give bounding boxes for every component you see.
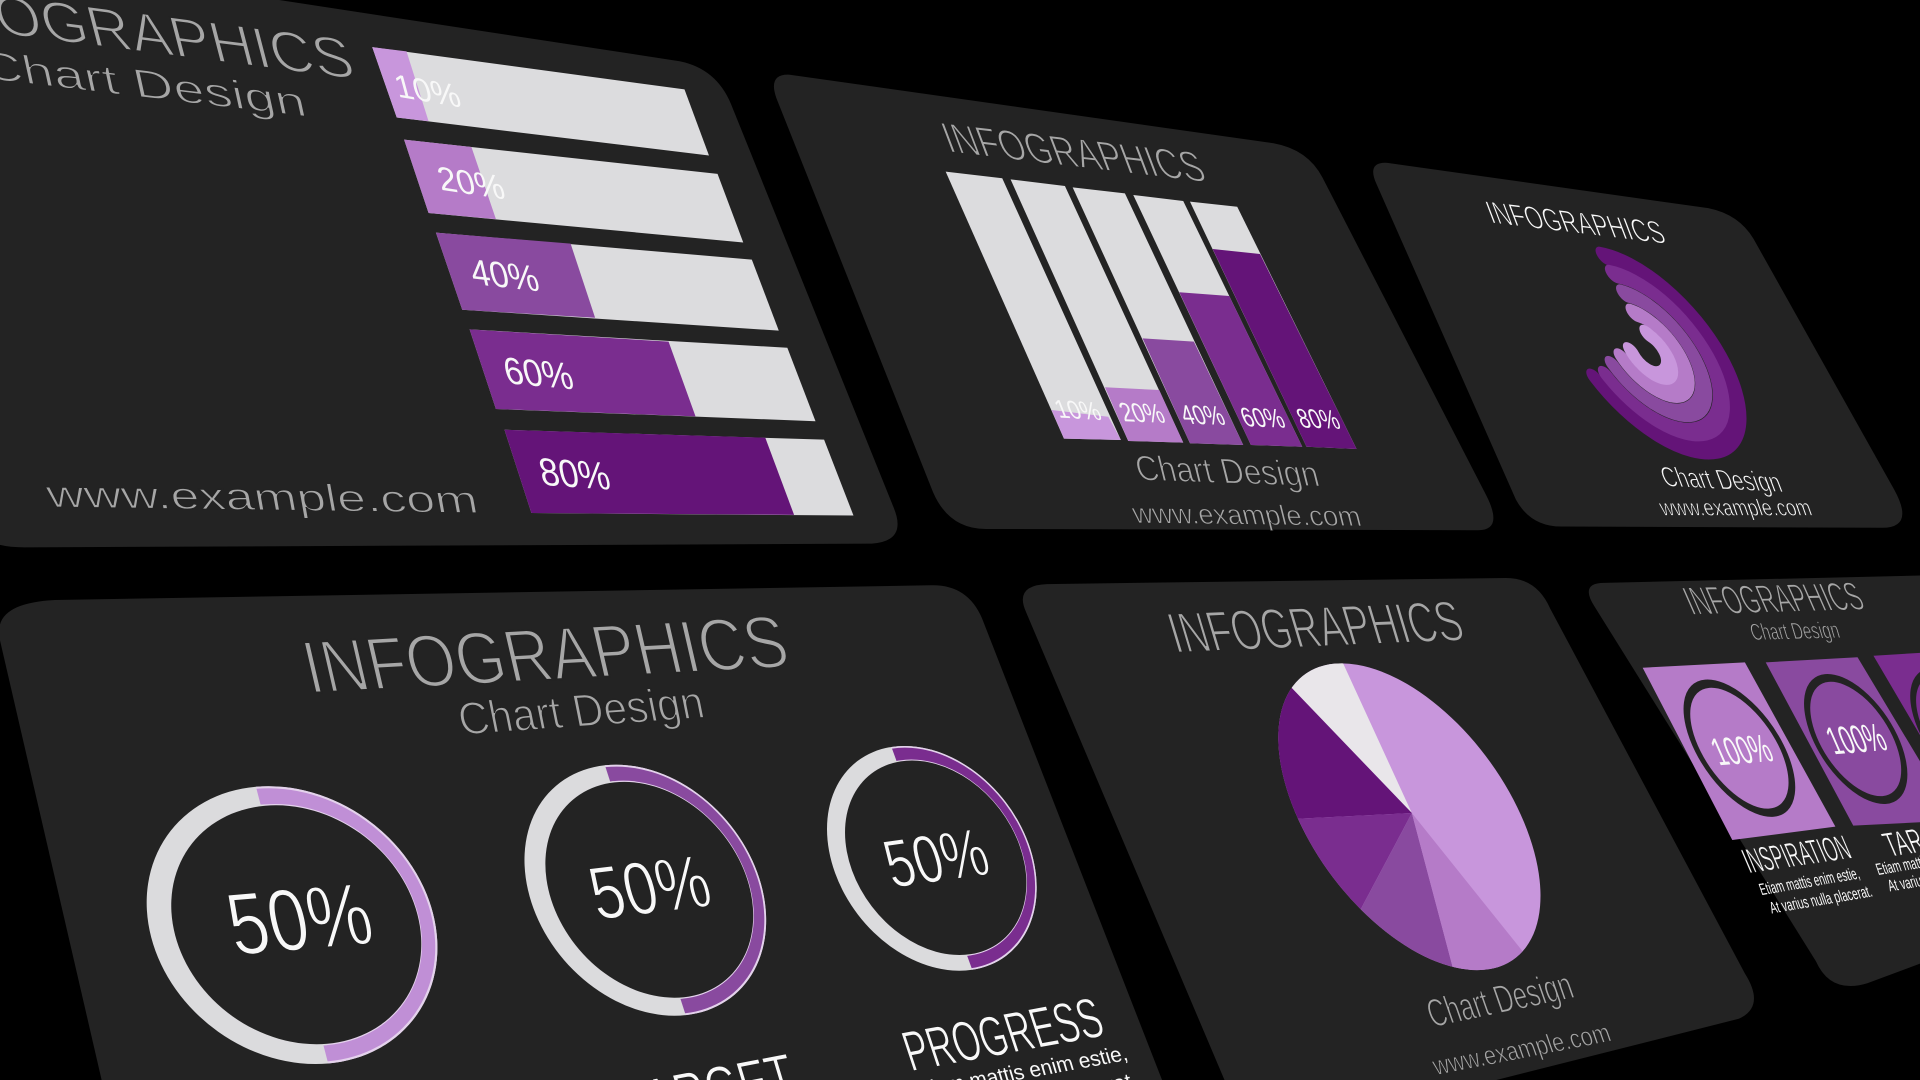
panel: pie chart <box>1023 578 1754 1080</box>
column 10% <box>946 172 1121 440</box>
subheading: Chart Design <box>1656 462 1787 499</box>
heading: INFOGRAPHICS <box>295 600 796 709</box>
panel: percentage cards <box>1589 574 1920 986</box>
subheading: Chart Design <box>1747 617 1843 646</box>
panel background <box>0 0 898 547</box>
bar 80%: 80% <box>535 450 614 499</box>
panel background <box>0 585 1162 1080</box>
panel background <box>774 75 1493 530</box>
ring chart 1: 50% <box>218 864 381 974</box>
subheading: Chart Design <box>1131 448 1323 494</box>
website url: www.example.com <box>1655 495 1816 521</box>
panel: spiral radial chart <box>1373 163 1902 528</box>
column 60%: 60% <box>1236 402 1289 434</box>
column 20% <box>1011 179 1183 443</box>
pie chart <box>1278 663 1540 970</box>
column 80% <box>1190 202 1357 449</box>
bar 60%: 60% <box>499 350 578 398</box>
column 10%: 10% <box>1050 394 1106 426</box>
website url: www.example.com <box>42 473 482 522</box>
panel background <box>1373 163 1902 528</box>
bar 10%: 10% <box>390 67 465 116</box>
panel: horizontal progress bars <box>0 0 898 547</box>
bar 20% <box>404 140 743 242</box>
panel: progress rings <box>0 585 1162 1080</box>
card 1: 100% <box>1705 727 1779 774</box>
ring chart 3: 50% <box>875 815 997 902</box>
panel background <box>1589 576 1920 986</box>
panel background <box>1023 578 1754 1080</box>
column 20%: 20% <box>1114 397 1169 429</box>
subheading: Chart Design <box>1421 964 1579 1036</box>
column 40% <box>1073 187 1243 445</box>
bar 40%: 40% <box>466 251 543 299</box>
heading: INFOGRAPHICS <box>1161 590 1471 665</box>
column 40%: 40% <box>1176 400 1229 431</box>
subheading: Chart Design <box>454 677 709 745</box>
heading: INFOGRAPHICS <box>1481 195 1671 252</box>
bar 80% <box>504 430 853 516</box>
ring chart 2: 50% <box>580 839 719 935</box>
bar 60% <box>470 329 816 421</box>
panel: vertical column chart <box>774 75 1493 533</box>
ring chart 2 <box>491 753 800 1027</box>
bar 20%: 20% <box>433 159 509 208</box>
ring chart 3 <box>795 732 1069 984</box>
bar 40% <box>436 233 779 331</box>
heading: INFOGRAPHICS <box>935 114 1212 192</box>
bar 10% <box>372 47 709 156</box>
card 2 <box>1766 657 1920 826</box>
card 1 <box>1643 662 1835 840</box>
card 3 <box>1873 649 1920 823</box>
column 80%: 80% <box>1292 403 1344 435</box>
website url: www.example.com <box>1128 498 1365 533</box>
column 60% <box>1133 195 1302 447</box>
ring chart 1 <box>115 774 469 1076</box>
spiral chart <box>1526 256 1774 450</box>
website url: www.example.com <box>1427 1018 1615 1080</box>
